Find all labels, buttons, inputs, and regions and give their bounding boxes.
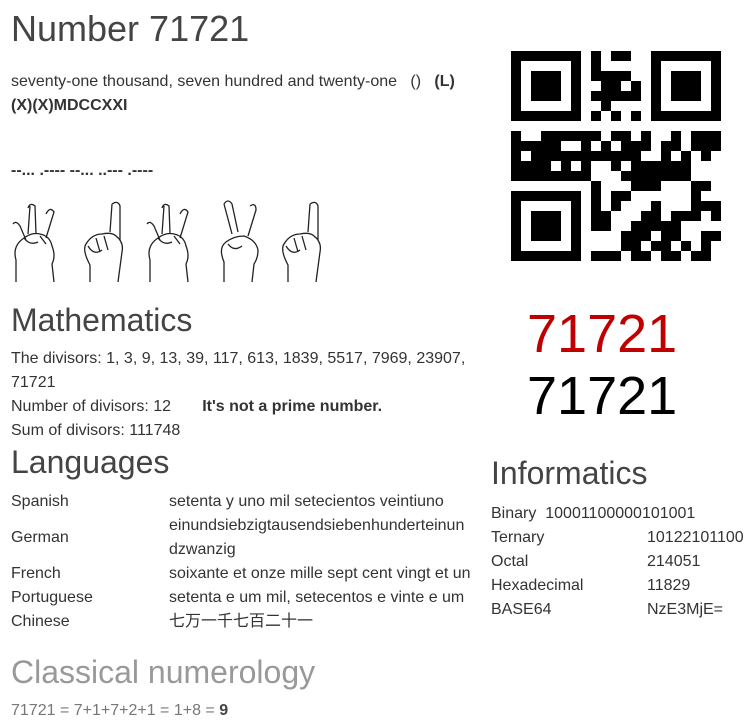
big number black: 71721: [527, 366, 677, 426]
text block: name: [11, 73, 455, 114]
text block: math facts: 71721: [11, 374, 56, 391]
heading: Classical numerology: Classical numerology: [11, 654, 315, 690]
text block: math facts: Sum of divisors: 111748: [11, 422, 180, 439]
text block: math facts: Number of divisors: 12 It's not a prime number.: [11, 398, 382, 415]
QR code: [511, 51, 721, 261]
big number red: 71721: [527, 304, 677, 364]
text block: name: (X)(X)MDCCXXI: [11, 97, 127, 114]
heading: Languages: Languages: [11, 444, 169, 480]
table: languages: German: [11, 529, 69, 546]
text block: numerology: 71721 = 7+1+7+2+1 = 1+8 = 9: [11, 702, 228, 719]
table: languages: 七万一千七百二十一: [169, 613, 313, 630]
table: languages: dzwanzig: [169, 541, 236, 558]
table: languages: Portuguese: [11, 589, 93, 606]
table: languages: Spanish: [11, 493, 69, 510]
table: languages: Chinese: [11, 613, 70, 630]
table: informatics: BASE64: [491, 601, 551, 618]
table: informatics: Binary 10001100000101001: [491, 505, 695, 522]
table: languages: setenta e um mil, setecentos e vinte e um: [169, 589, 464, 606]
table: informatics: Ternary: [491, 529, 544, 546]
table: informatics: NzE3MjE=: [647, 601, 723, 618]
title: Number 71721: [11, 8, 249, 49]
text block: math facts: [11, 350, 465, 439]
table: informatics: Hexadecimal: [491, 577, 583, 594]
table: languages: setenta y uno mil setecientos veintiuno: [169, 493, 444, 510]
table: languages: einundsiebzigtausendsiebenhunderteinun: [169, 517, 464, 534]
table: informatics: Octal: [491, 553, 528, 570]
table: languages: soixante et onze mille sept cent vingt et un: [169, 565, 471, 582]
table: languages: French: [11, 565, 61, 582]
heading: Mathematics: Mathematics: [11, 302, 192, 338]
text block: name: seventy-one thousand, seven hundred and twenty-one () (L): [11, 73, 455, 90]
morse code: --... .---- --... ..--- .----: [11, 162, 153, 179]
table: informatics: 11829: [647, 577, 690, 594]
text block: math facts: The divisors: 1, 3, 9, 13, 39, 117, 613, 1839, 5517, 7969, 23907,: [11, 350, 465, 367]
icon: hand signs: [12, 200, 322, 282]
table: informatics: 10122101100: [647, 529, 744, 546]
table: languages: [11, 493, 471, 630]
table: informatics: [491, 505, 744, 618]
heading: Informatics: Informatics: [491, 455, 647, 491]
table: informatics: 214051: [647, 553, 700, 570]
